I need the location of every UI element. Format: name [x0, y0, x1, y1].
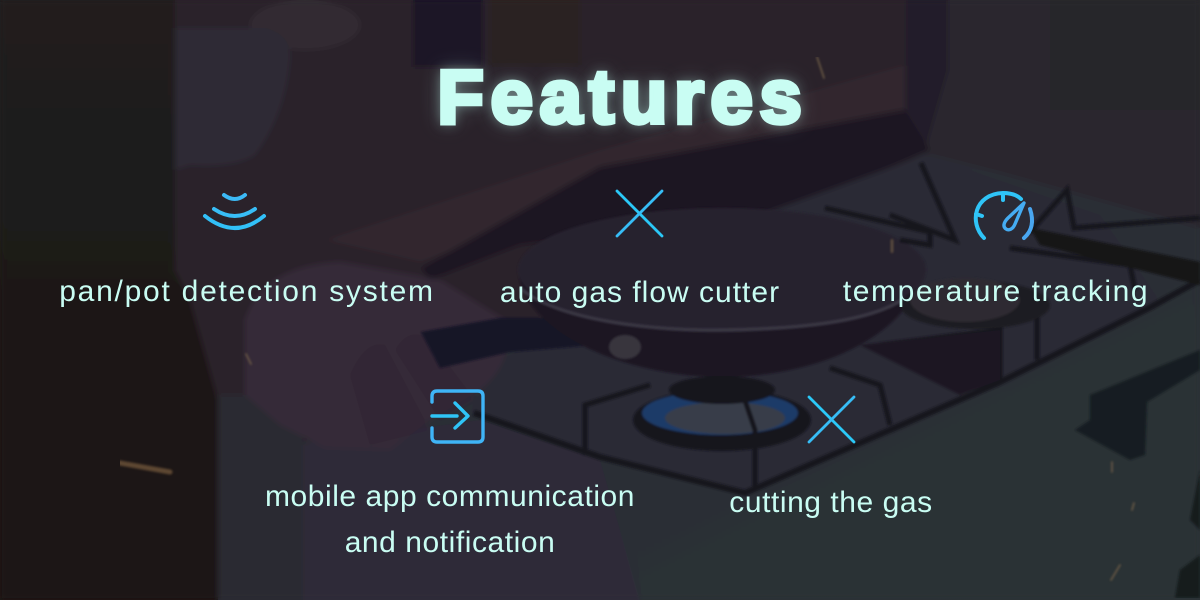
label: mobile app communication: [265, 480, 635, 513]
label: cutting the gas: [729, 486, 933, 519]
label: and notification: [345, 526, 555, 559]
icon: detection waves: [202, 192, 266, 230]
pan: [518, 225, 925, 377]
feature: auto gas flow cutter: [500, 190, 780, 309]
icon: cross: [616, 190, 664, 238]
stove side handle: [1075, 350, 1200, 460]
label: auto gas flow cutter: [500, 276, 780, 309]
feature: temperature tracking: [843, 191, 1149, 308]
label: [265, 480, 635, 559]
pan handle: [421, 318, 595, 368]
label: temperature tracking: [843, 275, 1149, 308]
front grate lines: [474, 280, 1200, 493]
icon: speedometer: [974, 191, 1034, 240]
icon: enter arrow: [430, 389, 485, 444]
icon: cross: [808, 396, 856, 444]
sparks: [120, 463, 170, 472]
feature: mobile app communication and notification: [265, 389, 635, 559]
burner: [633, 389, 811, 451]
feature: pan/pot detection system: [59, 192, 435, 308]
feature: cutting the gas: [729, 396, 933, 519]
title: Features: [437, 55, 809, 140]
rear burner and grate: [900, 281, 1050, 329]
label: pan/pot detection system: [59, 275, 435, 308]
